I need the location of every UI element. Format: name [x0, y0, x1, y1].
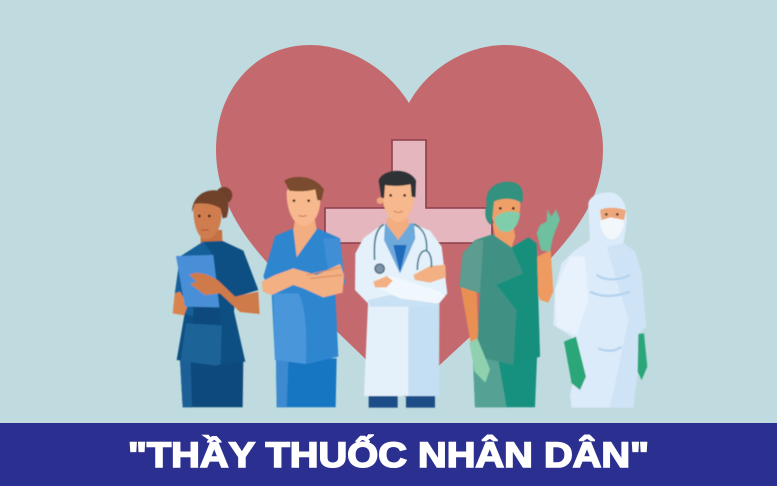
icon: medical cross	[325, 140, 492, 300]
figure: nurse with clipboard	[173, 187, 260, 407]
icon: large heart	[216, 45, 603, 397]
figure: worker in white protective suit	[553, 193, 647, 408]
figure: doctor in white coat with stethoscope	[355, 171, 447, 408]
figure: nurse in blue scrubs with crossed arms	[262, 177, 345, 407]
title banner	[0, 423, 777, 486]
figure: surgeon in green scrubs with OK gesture	[459, 182, 560, 407]
illustration: medical staff group	[173, 171, 647, 408]
title text: "THẦY THUỐC NHÂN DÂN"	[128, 435, 649, 475]
